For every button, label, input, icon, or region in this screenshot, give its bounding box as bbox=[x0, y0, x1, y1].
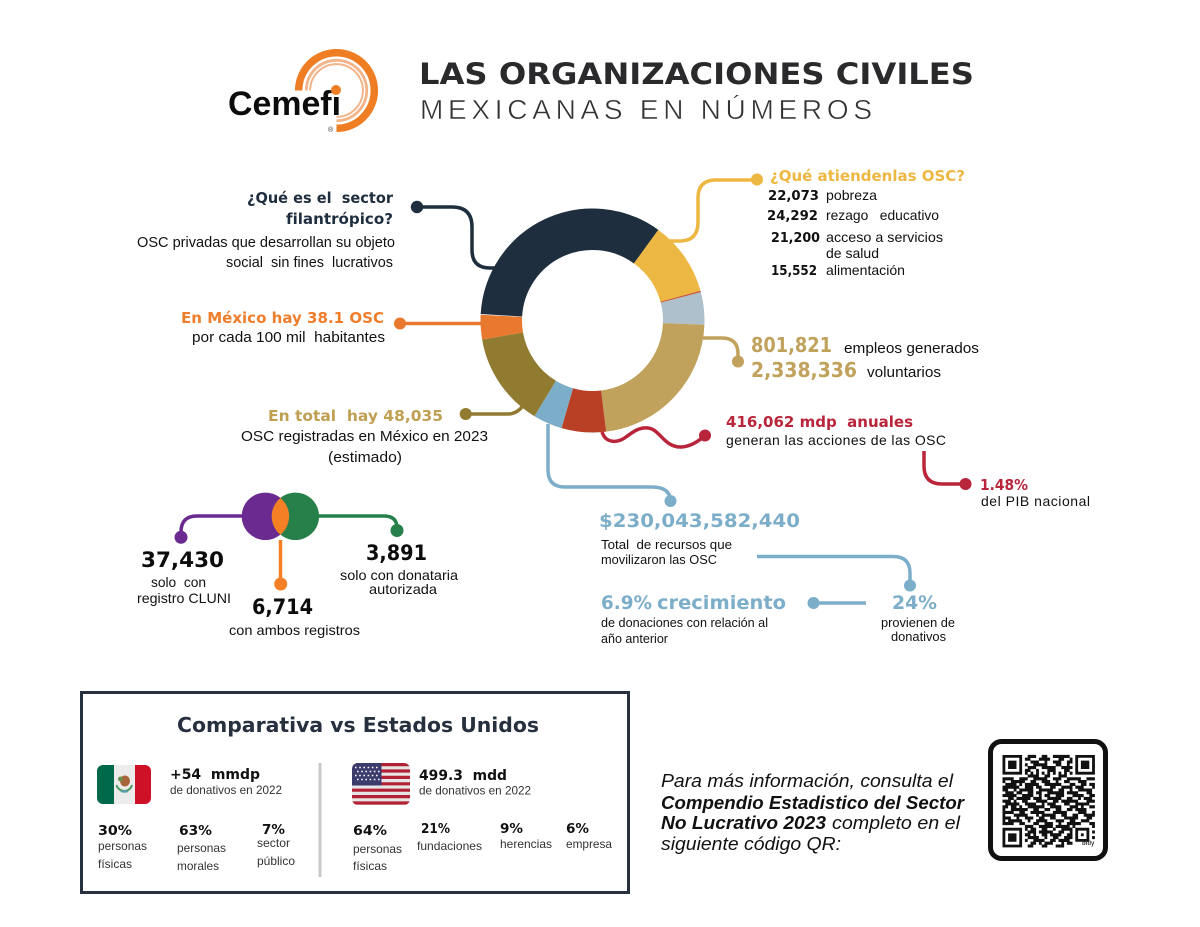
text block: más información: completo en el bbox=[832, 812, 961, 833]
text block: crecimiento bbox=[601, 592, 786, 646]
text block: OSC por habitantes: En México hay 38.1 OSC bbox=[181, 309, 384, 327]
stat: Estados Unidos donativos: de donativos en 2022 bbox=[419, 784, 531, 798]
stat: solo donataria: 3,891 bbox=[366, 541, 427, 566]
QR code: bitly bbox=[1082, 841, 1095, 847]
text block: empleos y voluntarios: voluntarios bbox=[867, 364, 941, 381]
text block: sector filantrópico: ¿Qué es el sector bbox=[247, 189, 394, 207]
stat: México donativos: de donativos en 2022 bbox=[170, 783, 282, 797]
text block: acciones de las OSC: 416,062 mdp anuales bbox=[726, 413, 913, 431]
text block: qué atienden las OSC: 24,292 bbox=[767, 209, 818, 224]
logo: Cemefi: Cemefi bbox=[228, 85, 341, 123]
stat: México 7% bbox=[257, 823, 295, 868]
stat: solo CLUNI: 37,430 bbox=[141, 548, 224, 573]
text block: más información: siguiente código QR: bbox=[661, 833, 841, 854]
text block: qué atienden las OSC: 22,073 bbox=[768, 189, 819, 204]
connector: a donativos bbox=[757, 556, 916, 592]
text block: recursos movilizados bbox=[599, 510, 800, 567]
text block: OSC por habitantes bbox=[181, 309, 385, 346]
stat: EU 64%: físicas bbox=[353, 859, 387, 873]
stat: México 63%: morales bbox=[177, 859, 219, 873]
text block: PIB nacional: del PIB nacional bbox=[981, 493, 1090, 509]
connector: qué atienden bbox=[668, 174, 763, 241]
stat: México 7%: sector bbox=[257, 836, 290, 850]
title: MEXICANAS EN NÚMEROS bbox=[420, 94, 872, 125]
text block: PIB nacional bbox=[980, 476, 1090, 509]
stat: México 30%: personas bbox=[98, 839, 147, 853]
text block: 24% donativos: donativos bbox=[891, 629, 946, 644]
icon: bandera de México bbox=[97, 765, 151, 804]
connector: OSC por habitantes bbox=[394, 318, 482, 330]
stat: México 30%: 30% bbox=[98, 824, 132, 839]
stat: México 63%: 63% bbox=[179, 824, 212, 839]
stat: ambos registros: con ambos registros bbox=[229, 622, 360, 638]
text block: qué atienden las OSC: alimentación bbox=[826, 262, 905, 278]
stat: solo donataria bbox=[340, 541, 458, 597]
text block: PIB nacional: 1.48% bbox=[980, 476, 1028, 494]
text block: empleos y voluntarios: empleos generados bbox=[844, 340, 979, 357]
text block: total de OSC: (estimado) bbox=[328, 449, 402, 466]
text block: qué atienden las OSC: rezago educativo bbox=[826, 207, 939, 223]
stat: ambos registros bbox=[229, 595, 360, 638]
text block: sector filantrópico bbox=[137, 189, 395, 271]
stat: México donativos: +54 mmdp bbox=[170, 767, 260, 783]
heading: comparativa: Comparativa vs Estados Unidos bbox=[177, 713, 539, 737]
stat: solo CLUNI bbox=[137, 548, 231, 606]
text block: crecimiento: 6.9% bbox=[601, 592, 652, 614]
stat: EU 9% bbox=[500, 822, 552, 851]
connector: empleos bbox=[703, 338, 744, 368]
text block: recursos movilizados: $230,043,582,440 bbox=[599, 510, 800, 532]
text block: más información bbox=[661, 770, 966, 854]
stat: EU 64%: personas bbox=[353, 842, 402, 856]
text block: total de OSC: OSC registradas en México en 2023 bbox=[241, 428, 488, 445]
stat: México donativos bbox=[170, 767, 282, 797]
logo: Cemefi bbox=[228, 53, 374, 134]
connector: total de OSC bbox=[460, 407, 522, 420]
text block: más información: Para más información, consulta el bbox=[661, 770, 954, 791]
stat: solo CLUNI: solo con bbox=[151, 574, 206, 590]
text block: recursos movilizados: movilizaron las OSC bbox=[601, 552, 717, 567]
text block: empleos y voluntarios: 801,821 bbox=[751, 333, 832, 357]
text block: empleos y voluntarios bbox=[751, 333, 979, 382]
stat: solo CLUNI: registro CLUNI bbox=[137, 590, 231, 606]
text block: más información: No Lucrativo 2023 bbox=[661, 812, 827, 833]
text block: OSC por habitantes: por cada 100 mil habitantes bbox=[192, 329, 385, 346]
stat: Estados Unidos donativos bbox=[419, 768, 531, 798]
stat: solo donataria: solo con donataria bbox=[340, 567, 458, 583]
stat: EU 6% bbox=[566, 822, 612, 851]
text block: qué atienden las OSC: de salud bbox=[826, 245, 879, 261]
stat: EU 6%: 6% bbox=[566, 822, 589, 837]
venn diagram bbox=[174, 493, 404, 590]
text block: 24% donativos: 24% bbox=[892, 592, 937, 614]
text block: qué atienden las OSC bbox=[767, 167, 965, 279]
text block: más información: Compendio Estadistico del Sector bbox=[661, 792, 966, 813]
connector: PIB bbox=[924, 451, 972, 490]
text block: qué atienden las OSC: pobreza bbox=[826, 187, 877, 203]
icon: bandera de Estados Unidos bbox=[352, 763, 410, 805]
text block: crecimiento: de donaciones con relación al bbox=[601, 615, 768, 630]
stat: ambos registros: 6,714 bbox=[252, 595, 313, 620]
text block: qué atienden las OSC: 21,200 bbox=[771, 231, 820, 246]
connector: recursos movilizados bbox=[548, 424, 676, 507]
text block: recursos movilizados: Total de recursos que bbox=[601, 537, 732, 552]
title bbox=[419, 57, 974, 125]
stat: EU 21%: fundaciones bbox=[417, 839, 482, 853]
stat: EU 9%: herencias bbox=[500, 837, 552, 851]
text block: crecimiento: crecimiento bbox=[657, 592, 786, 614]
stat: México 7%: público bbox=[257, 854, 295, 868]
stat: solo donataria: autorizada bbox=[369, 581, 437, 597]
stat: México 63%: personas bbox=[177, 841, 226, 855]
text block: sector filantrópico: filantrópico? bbox=[286, 210, 393, 228]
stat: EU 9%: 9% bbox=[500, 822, 523, 837]
title: LAS ORGANIZACIONES CIVILES bbox=[419, 57, 974, 91]
text block: 24% donativos: provienen de bbox=[881, 615, 955, 630]
logo: Cemefi: ® bbox=[328, 126, 334, 134]
text block: qué atienden las OSC: 15,552 bbox=[771, 264, 817, 279]
text block: crecimiento: año anterior bbox=[601, 631, 669, 646]
text block: sector filantrópico: OSC privadas que desarrollan su objeto bbox=[137, 234, 395, 251]
stat: EU 6%: empresa bbox=[566, 837, 612, 851]
stat: Estados Unidos donativos: 499.3 mdd bbox=[419, 768, 507, 784]
text block: acciones de las OSC: generan las acciones de las OSC bbox=[726, 432, 946, 448]
text block: total de OSC bbox=[241, 407, 488, 466]
text block: 24% donativos bbox=[881, 592, 955, 644]
stat: EU 21% bbox=[417, 822, 482, 853]
stat: EU 64%: 64% bbox=[353, 824, 387, 839]
text block: empleos y voluntarios: 2,338,336 bbox=[751, 358, 857, 382]
connector: sector filantrópico bbox=[411, 201, 495, 268]
text block: sector filantrópico: social sin fines lucrativos bbox=[226, 254, 393, 271]
stat: México 63% bbox=[177, 824, 226, 873]
text block: qué atienden las OSC: ¿Qué atiendenlas OSC? bbox=[770, 167, 965, 185]
stat: EU 21%: 21% bbox=[421, 822, 450, 837]
stat: México 30% bbox=[98, 824, 147, 871]
text block: total de OSC: En total hay 48,035 bbox=[268, 407, 443, 425]
connector: a crecimiento bbox=[808, 597, 866, 609]
text block: qué atienden las OSC: acceso a servicios bbox=[826, 229, 943, 245]
stat: EU 64% bbox=[353, 824, 402, 873]
stat: México 7%: 7% bbox=[262, 823, 285, 838]
stat: México 30%: físicas bbox=[98, 857, 132, 871]
connector: derrama económica bbox=[602, 428, 711, 447]
text block: acciones de las OSC bbox=[726, 413, 946, 448]
panel: comparativa vs Estados Unidos bbox=[82, 692, 628, 892]
donut chart bbox=[501, 229, 684, 412]
QR code bbox=[990, 742, 1106, 858]
